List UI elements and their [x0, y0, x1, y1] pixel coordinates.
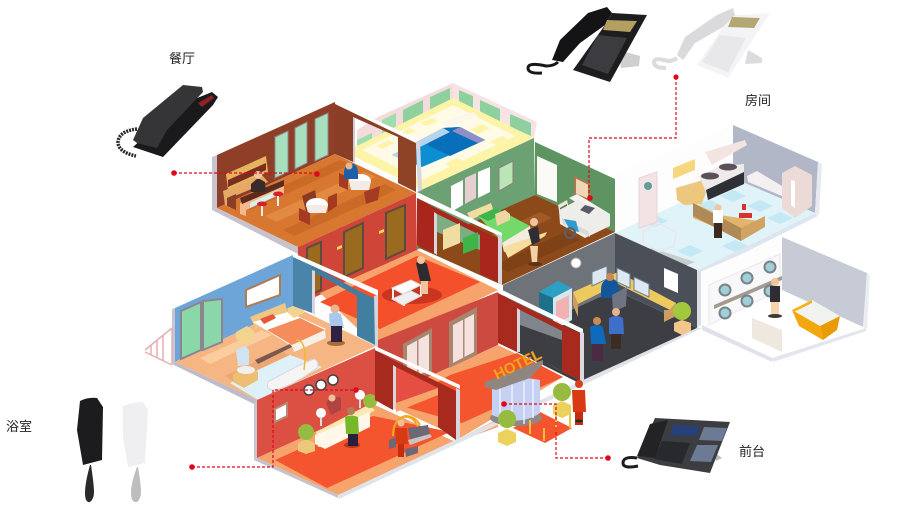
- panel: lobby: [254, 346, 585, 499]
- panel: blue guest room: [145, 253, 378, 406]
- luggage cart and porter: [389, 416, 432, 457]
- icon: black desk phone: [528, 7, 647, 82]
- washing machines: [709, 254, 782, 325]
- panel: upper corridor: [298, 193, 498, 348]
- figures: staff: [590, 308, 624, 361]
- balcony doors: [181, 299, 222, 359]
- figure: maid with trolley: [382, 256, 442, 306]
- figure: lobby guest: [344, 407, 360, 448]
- plant: [298, 424, 315, 454]
- panel: laundry: [700, 237, 870, 362]
- reception desk: [315, 390, 377, 449]
- figure: doorman: [572, 380, 586, 425]
- door and shelf: [639, 159, 695, 228]
- label: guest room: 房间: [745, 93, 771, 108]
- stoves: [676, 140, 747, 205]
- wall picture: [275, 403, 287, 422]
- security room divider wall: [498, 288, 584, 381]
- bed: [467, 203, 547, 258]
- panel: security room: [503, 233, 702, 385]
- elevator doors: [403, 307, 477, 386]
- hotel sign: HOTEL: [491, 346, 544, 384]
- icon: front desk phone: [623, 418, 730, 473]
- clocks: [304, 375, 338, 395]
- desk with laptop and fridge: [558, 194, 610, 238]
- bar counter: [223, 156, 284, 216]
- sink and fridge: [747, 166, 812, 218]
- figure: guest: [327, 304, 345, 346]
- panel: rooftop pool: [345, 83, 537, 190]
- panel: restaurant: [212, 102, 416, 254]
- icon: black wall phone for restaurant: [118, 85, 218, 157]
- panel: kitchen: [615, 125, 822, 275]
- plant: [673, 302, 691, 335]
- bed: [236, 303, 326, 352]
- doors: [307, 205, 405, 296]
- callout lines: [174, 77, 676, 467]
- wall panel: [664, 268, 678, 293]
- windows: restaurant: [275, 113, 328, 178]
- balcony rail: [145, 328, 172, 365]
- hotel entrance: [485, 346, 572, 443]
- plants at entrance: [498, 383, 571, 446]
- label: restaurant: 餐厅: [169, 51, 195, 66]
- picture: [246, 275, 280, 307]
- icon: white bathroom phone: [123, 402, 148, 502]
- control desk: [573, 266, 676, 322]
- label: bathroom: 浴室: [6, 419, 32, 434]
- callout dots: [171, 74, 679, 470]
- figure: laundry worker: [768, 278, 782, 318]
- label: front desk: 前台: [739, 444, 765, 459]
- panel: green guest room: [416, 138, 615, 285]
- drinks cabinet: [539, 281, 572, 331]
- curtains and window: [451, 156, 589, 212]
- icon: black bathroom phone: [77, 398, 103, 502]
- prep counter and chef: [693, 203, 765, 241]
- dining tables: [299, 162, 380, 225]
- laundry cart: [792, 300, 840, 340]
- figure: housekeeper: [528, 218, 542, 266]
- panel: lower corridor: [378, 292, 563, 440]
- clothes rack: [752, 318, 782, 352]
- clock: [571, 258, 581, 268]
- icon: white desk phone: [654, 8, 770, 78]
- bathroom: [233, 340, 318, 390]
